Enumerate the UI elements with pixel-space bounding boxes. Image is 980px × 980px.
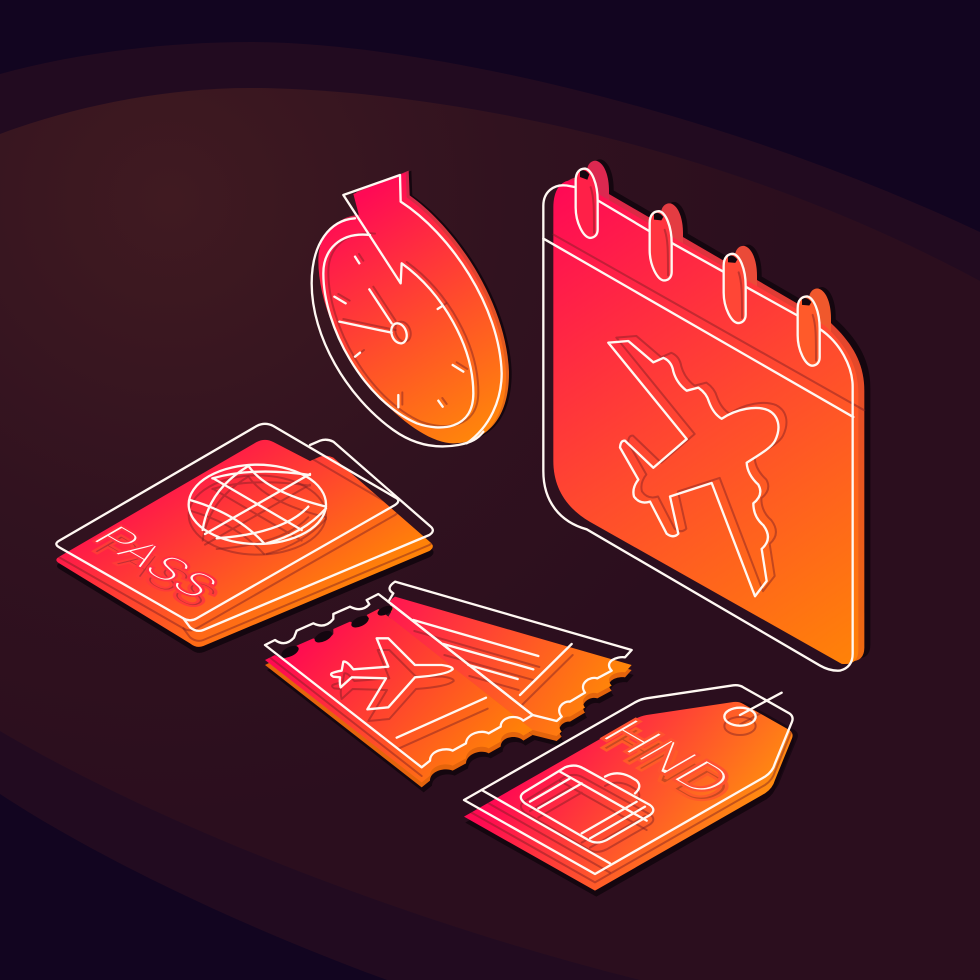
suitcase icon	[521, 766, 653, 842]
calendar outline	[543, 185, 853, 671]
icon: clock with arrow	[312, 171, 512, 446]
PASS label: PASS	[81, 518, 231, 605]
airplane outline	[608, 341, 778, 596]
calendar binding rings	[576, 169, 820, 366]
passport front outline	[56, 424, 398, 620]
calendar ring backs	[587, 161, 831, 332]
ticket airplane	[331, 638, 453, 709]
tag body	[464, 702, 793, 891]
clock center	[389, 321, 409, 346]
front ticket	[265, 609, 533, 782]
icon: passport	[56, 424, 434, 653]
tag shadow text: HND	[587, 720, 748, 813]
calendar face	[553, 180, 858, 664]
icon: plane tickets	[265, 582, 634, 792]
globe emblem	[189, 465, 326, 544]
calendar header line	[543, 239, 853, 417]
back ticket outline	[388, 582, 632, 721]
tag outline	[464, 685, 793, 874]
tag hole and string	[724, 693, 782, 726]
clock ticks and hands	[334, 257, 463, 407]
HND label: HND	[587, 711, 748, 804]
front ticket outline	[265, 594, 533, 767]
clock outer ring outline	[312, 218, 483, 446]
icon: luggage tag	[464, 685, 798, 897]
front ticket perforation shadows	[280, 604, 394, 660]
passport cover	[56, 440, 433, 647]
icon: calendar with airplane	[543, 159, 870, 671]
ticket lines	[397, 620, 572, 738]
passport back outline	[183, 440, 433, 631]
clock face and arrow outline	[323, 175, 502, 443]
back ticket	[388, 597, 632, 736]
passport shadow text: PASS	[81, 528, 231, 615]
